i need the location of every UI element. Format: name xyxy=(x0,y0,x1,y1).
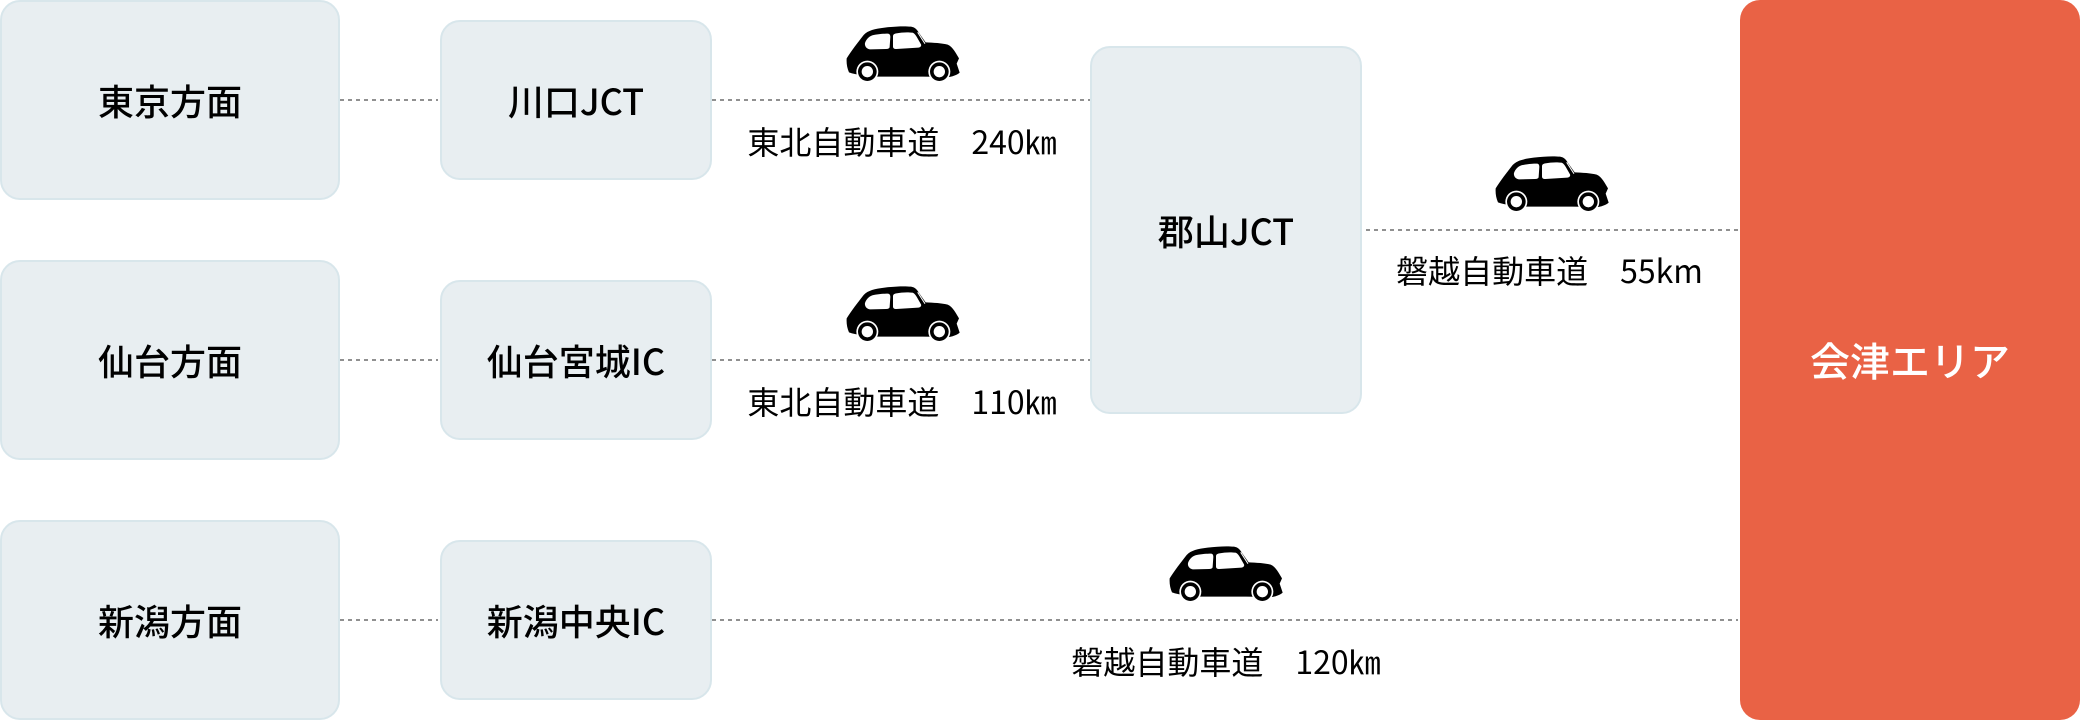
panel: 新潟方面 xyxy=(0,520,340,720)
connector: 仙台宮城IC to 郡山JCT xyxy=(712,359,1090,361)
icon: car on 磐越自動車道 120km xyxy=(1170,546,1283,601)
connector: 仙台方面 to 仙台宮城IC xyxy=(340,359,438,361)
label: 磐越自動車道 55km: 磐越自動車道 55km xyxy=(1396,246,1703,292)
panel: 郡山JCT xyxy=(1090,46,1362,414)
panel: 新潟中央IC: 新潟中央IC xyxy=(487,594,665,646)
panel: 仙台方面 xyxy=(0,260,340,460)
panel: 仙台方面: 仙台方面 xyxy=(98,334,242,386)
icon: car on 磐越自動車道 55km xyxy=(1496,156,1609,211)
panel: 東京方面 xyxy=(0,0,340,200)
panel: 新潟中央IC xyxy=(440,540,712,700)
panel: 会津エリア destination: 会津エリア xyxy=(1810,330,2010,388)
label: 磐越自動車道 120km: 磐越自動車道 120㎞ xyxy=(1071,638,1381,684)
label: 東北自動車道 110km: 東北自動車道 110㎞ xyxy=(747,378,1057,424)
panel: 川口JCT: 川口JCT xyxy=(508,74,644,126)
connector: 新潟方面 to 新潟中央IC xyxy=(340,619,438,621)
panel: 川口JCT xyxy=(440,20,712,180)
panel: 仙台宮城IC xyxy=(440,280,712,440)
connector: 東京方面 to 川口JCT xyxy=(340,99,438,101)
icon: car on 東北自動車道 110km xyxy=(846,286,960,341)
label: 東北自動車道 240km: 東北自動車道 240㎞ xyxy=(747,118,1057,164)
connector: 新潟中央IC to 会津エリア xyxy=(712,619,1738,621)
connector: 郡山JCT to 会津エリア xyxy=(1366,229,1738,231)
panel: 東京方面: 東京方面 xyxy=(98,74,242,126)
panel: 郡山JCT: 郡山JCT xyxy=(1158,204,1294,256)
connector: 川口JCT to 郡山JCT xyxy=(712,99,1090,101)
panel: 会津エリア destination xyxy=(1740,0,2080,720)
panel: 仙台宮城IC: 仙台宮城IC xyxy=(487,334,665,386)
icon: car on 東北自動車道 240km xyxy=(846,26,960,81)
panel: 新潟方面: 新潟方面 xyxy=(98,594,242,646)
